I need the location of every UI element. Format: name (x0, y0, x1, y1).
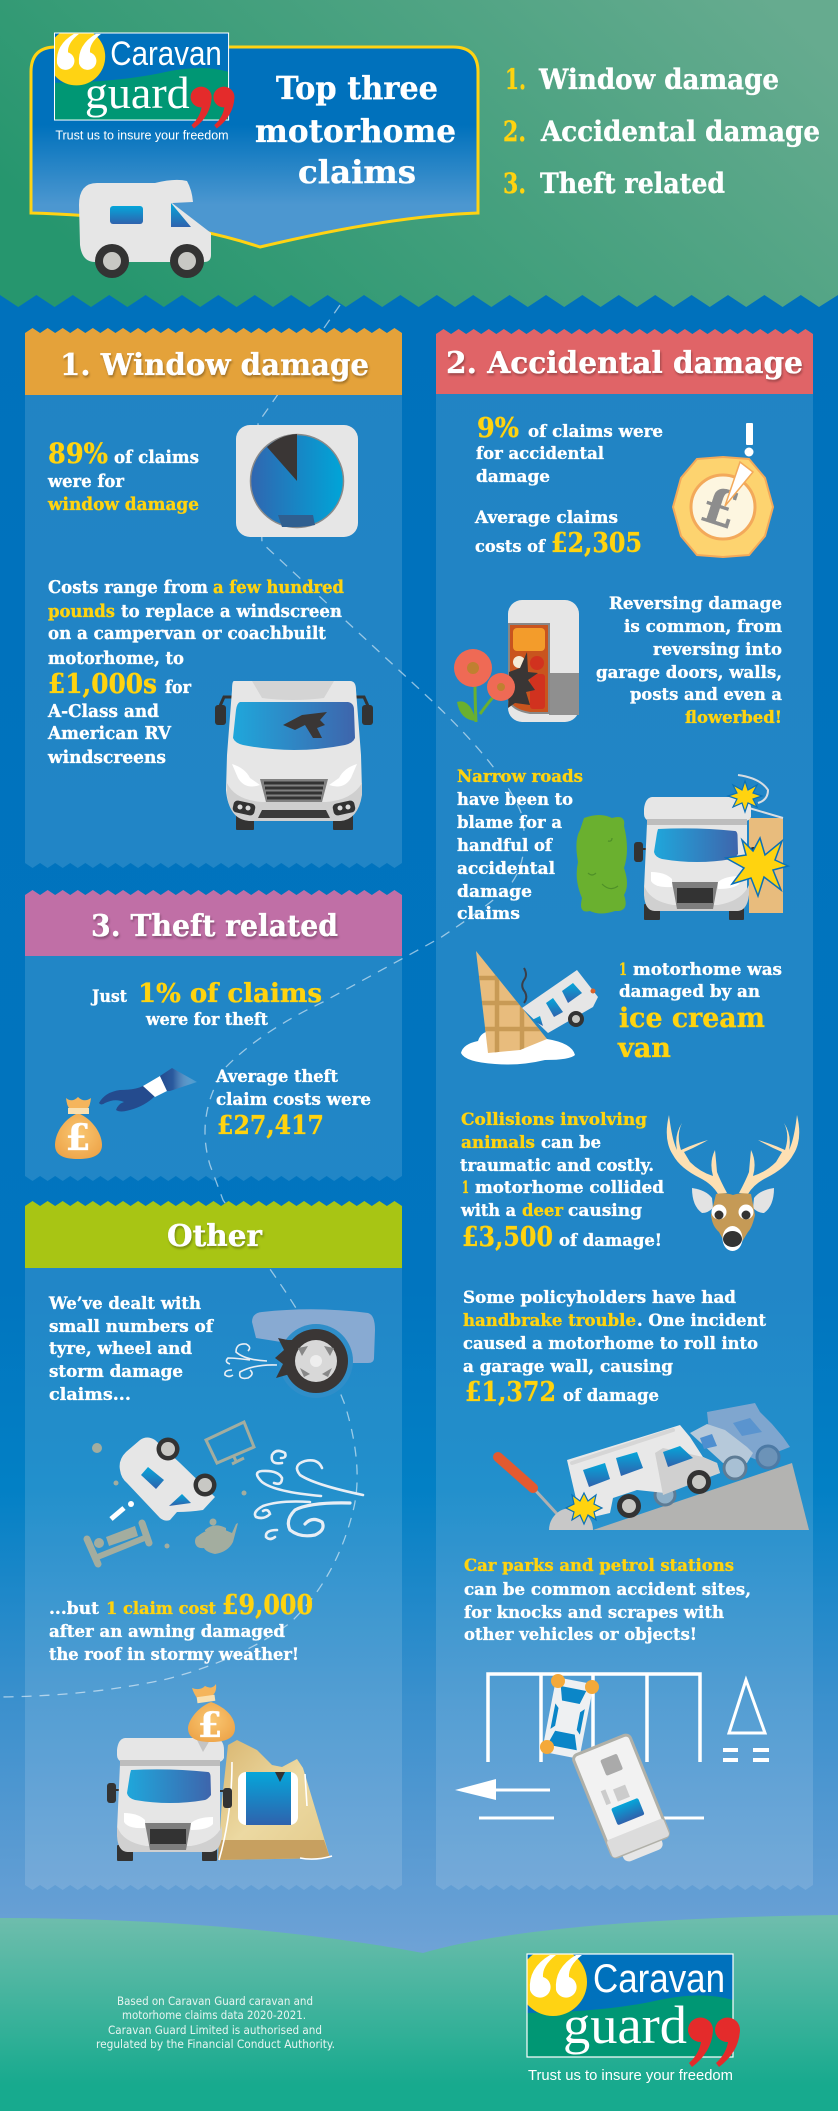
text: reversing damage: flowerbed! (685, 708, 782, 728)
text: 9% of claims: £2,305 (551, 528, 642, 559)
text: collisions involving animals: Collisions involving (461, 1110, 647, 1130)
text: car parks (464, 1556, 751, 1645)
text: reversing damage: Reversing damage (609, 594, 782, 614)
text: costs range: £1,000s (48, 669, 157, 700)
text: small numbers of claims: small numbers of (49, 1317, 215, 1337)
footer text: Caravan Guard Limited is authorised and (108, 2023, 322, 2037)
icon: money bag (55, 1097, 102, 1159)
text: 1 claim cost £9,000: the roof in stormy weather! (49, 1645, 299, 1665)
icon: wind swirls (255, 1451, 363, 1539)
text: 9% of claims: costs of (475, 537, 547, 557)
text: collisions involving animals: deer (522, 1201, 564, 1221)
text: collisions involving animals: causing (568, 1201, 642, 1221)
text: collisions involving animals: traumatic and costly. (460, 1156, 654, 1176)
logo: Caravan Guard bottom: Trust us to insure your freedom (528, 2067, 733, 2084)
text: narrow roads: blame for a (457, 813, 562, 833)
text: reversing damage (596, 594, 782, 728)
text: narrow roads: have been to (457, 790, 573, 810)
header: accidental damage (436, 329, 813, 394)
icon: rolling motorhome and handbrake (498, 1403, 809, 1530)
logo: Caravan Guard top: Trust us to insure your freedom (55, 128, 229, 142)
list: top three claims: 1. (505, 63, 526, 96)
logo: Caravan Guard top: Caravan (110, 35, 222, 73)
text: 89% of claims: 89% (48, 437, 108, 470)
icon: cracked window pie (236, 425, 358, 537)
text: average theft claim: claim costs were (216, 1090, 371, 1110)
footer text: Based on Caravan Guard caravan and (117, 1994, 313, 2008)
icon: ice cream cone crushing motorhome (461, 950, 598, 1064)
text: car parks: for knocks and scrapes with (464, 1603, 724, 1623)
header: other: Other (167, 1219, 263, 1254)
icon: motorhome between hedge and wall (634, 797, 759, 920)
text: costs range: to replace a windscreen (121, 601, 342, 622)
text: collisions involving animals: with a (460, 1201, 516, 1221)
icon: wall (738, 775, 783, 913)
text: costs range: Costs range from (48, 577, 208, 598)
icon: burst tyre (225, 1309, 375, 1398)
text: car parks: Car parks and petrol stations (464, 1556, 734, 1576)
list: top three claims: Accidental damage (540, 115, 820, 148)
text: collisions involving animals: 1 (462, 1178, 469, 1198)
logo: Caravan Guard bottom (519, 1948, 740, 2084)
text: ice cream van: ice cream (619, 1003, 765, 1034)
text: costs range: on a campervan or coachbuilt (48, 623, 327, 644)
logo: Caravan Guard bottom: Caravan (593, 1957, 725, 2001)
text: 9% of claims: 9% (477, 413, 519, 444)
text: small numbers of claims: We’ve dealt with (48, 1294, 201, 1314)
icon: thief arm (99, 1068, 197, 1112)
text: 89% of claims (47, 437, 199, 515)
header: accidental damage: 2. Accidental damage (446, 346, 803, 381)
text: costs range: windscreens (47, 747, 166, 768)
text: narrow roads (457, 767, 583, 924)
panel: other body (25, 1268, 402, 1890)
text: collisions involving animals: £3,500 (462, 1222, 553, 1253)
list: top three claims: 3. (503, 167, 526, 200)
text: costs range (47, 577, 344, 768)
icon: awning tent (218, 1740, 332, 1860)
text: handbrake trouble: of damage (563, 1386, 659, 1406)
icon: money bag on roof (188, 1684, 235, 1746)
text: small numbers of claims: tyre, wheel and (49, 1339, 192, 1359)
text: just 1% of claims: were for theft (145, 1010, 268, 1030)
diagram: car park markings (455, 1674, 769, 1818)
text: 89% of claims: were for (47, 471, 124, 492)
header: theft related: 3. Theft related (91, 909, 338, 944)
icon: overturned motorhome (111, 1438, 216, 1521)
text: 9% of claims: for accidental (476, 444, 605, 464)
text: small numbers of claims: claims... (49, 1385, 131, 1405)
text: handbrake trouble: . One incident (637, 1311, 766, 1331)
text: 1 claim cost £9,000: ...but (49, 1599, 99, 1619)
text: handbrake trouble: caused a motorhome to roll into (463, 1334, 758, 1354)
text: average theft claim (215, 1067, 371, 1141)
logo: Caravan Guard top: guard (85, 67, 190, 118)
text: 9% of claims: damage (476, 467, 550, 487)
text: 1 claim cost £9,000: £9,000 (222, 1590, 313, 1621)
text: handbrake trouble: Some policyholders have had (463, 1288, 736, 1308)
footer green band (0, 1915, 838, 2111)
text: 1 claim cost £9,000 (49, 1590, 313, 1665)
text: reversing damage: garage doors, walls, (596, 663, 782, 683)
text: narrow roads: Narrow roads (457, 767, 583, 787)
dashed route line (0, 305, 524, 1697)
text: handbrake trouble (463, 1288, 766, 1408)
text: average theft claim: Average theft (215, 1067, 338, 1087)
text: collisions involving animals: motorhome collided (475, 1178, 664, 1198)
text: costs range: American RV (47, 723, 172, 744)
text: small numbers of claims: storm damage (49, 1362, 183, 1382)
text: 89% of claims: of claims (114, 447, 199, 468)
title banner (31, 47, 478, 247)
text: collisions involving animals: animals (461, 1133, 535, 1153)
text: handbrake trouble: £1,372 (465, 1377, 556, 1408)
text: handbrake trouble: handbrake trouble (463, 1311, 636, 1331)
logo: Caravan Guard top (48, 28, 234, 142)
text: car parks: other vehicles or objects! (464, 1625, 697, 1645)
list: top three claims (503, 63, 820, 200)
list: top three claims: Window damage (538, 63, 779, 96)
icon: hedge (576, 815, 627, 914)
text: costs range: pounds (48, 601, 115, 622)
header: theft related (25, 890, 402, 956)
text: handbrake trouble: a garage wall, causing (463, 1357, 673, 1377)
text: narrow roads: damage (457, 882, 532, 902)
list: top three claims: Theft related (540, 167, 725, 200)
icon: flying household objects (87, 1422, 254, 1564)
icon: money bag: £ (65, 1117, 91, 1159)
title text: motorhome (255, 112, 456, 150)
text: 1 claim cost £9,000: after an awning damaged (49, 1622, 285, 1642)
text: ice cream van: 1 (619, 960, 627, 980)
text: 9% of claims: Average claims (474, 508, 618, 528)
text: 9% of claims (474, 413, 663, 559)
icon: cracked pound coin (673, 423, 773, 557)
text: ice cream van (617, 960, 782, 1064)
footer text (96, 1994, 335, 2051)
icon: motorhome top view (572, 1734, 673, 1867)
header: window damage: 1. Window damage (60, 348, 369, 383)
text: reversing damage: posts and even a (630, 685, 782, 705)
icon: parked car with sparks (540, 1674, 599, 1759)
text: just 1% of claims (90, 979, 322, 1030)
header: other (25, 1201, 402, 1268)
list: top three claims: 2. (503, 115, 526, 148)
icon: money bag on roof: £ (198, 1705, 222, 1746)
text: car parks: can be common accident sites, (464, 1580, 751, 1600)
text: ice cream van: motorhome was (633, 960, 782, 980)
icon: top motorhome (79, 180, 211, 278)
header: window damage (25, 328, 402, 395)
logo: Caravan Guard bottom: guard (563, 1995, 687, 2055)
text: just 1% of claims: Just (90, 987, 127, 1007)
text: small numbers of claims (48, 1294, 215, 1405)
icon: motorhome under awning (107, 1738, 232, 1861)
icon: deer (667, 1115, 799, 1251)
icon: impact stars (726, 781, 788, 896)
panel: accidental damage body (436, 394, 813, 1890)
text: just 1% of claims: 1% of claims (138, 979, 322, 1009)
title text (255, 69, 456, 191)
text: costs range: a few hundred (213, 577, 344, 598)
icon: cracked pound coin: £ (694, 474, 746, 541)
icon: motorhome front with cracked windscreen (215, 681, 373, 830)
text: narrow roads: handful of (457, 836, 554, 856)
text: reversing damage: reversing into (653, 640, 782, 660)
text: narrow roads: accidental (457, 859, 556, 879)
text: average theft claim: £27,417 (217, 1111, 324, 1141)
header green band (0, 0, 838, 307)
panel: theft related body (25, 956, 402, 1181)
text: 9% of claims: of claims were (528, 422, 663, 442)
text: 1 claim cost £9,000: 1 claim cost (106, 1599, 216, 1619)
text: reversing damage: is common, from (624, 617, 782, 637)
text: ice cream van: damaged by an (619, 982, 760, 1002)
icon: rear light and flowers (454, 600, 579, 722)
footer text: motorhome claims data 2020-2021. (122, 2008, 306, 2022)
text: ice cream van: van (617, 1033, 671, 1064)
text: 89% of claims: window damage (47, 494, 199, 515)
text: collisions involving animals: can be (541, 1133, 601, 1153)
text: collisions involving animals (460, 1110, 664, 1253)
panel: window damage body (25, 395, 402, 868)
title text: claims (298, 153, 416, 191)
text: costs range: motorhome, to (48, 648, 184, 669)
title text: Top three (276, 69, 438, 107)
text: costs range: for (165, 677, 191, 698)
text: costs range: A-Class and (47, 701, 159, 722)
text: collisions involving animals: of damage! (559, 1231, 662, 1251)
text: narrow roads: claims (457, 904, 520, 924)
footer text: regulated by the Financial Conduct Authority. (96, 2037, 335, 2051)
